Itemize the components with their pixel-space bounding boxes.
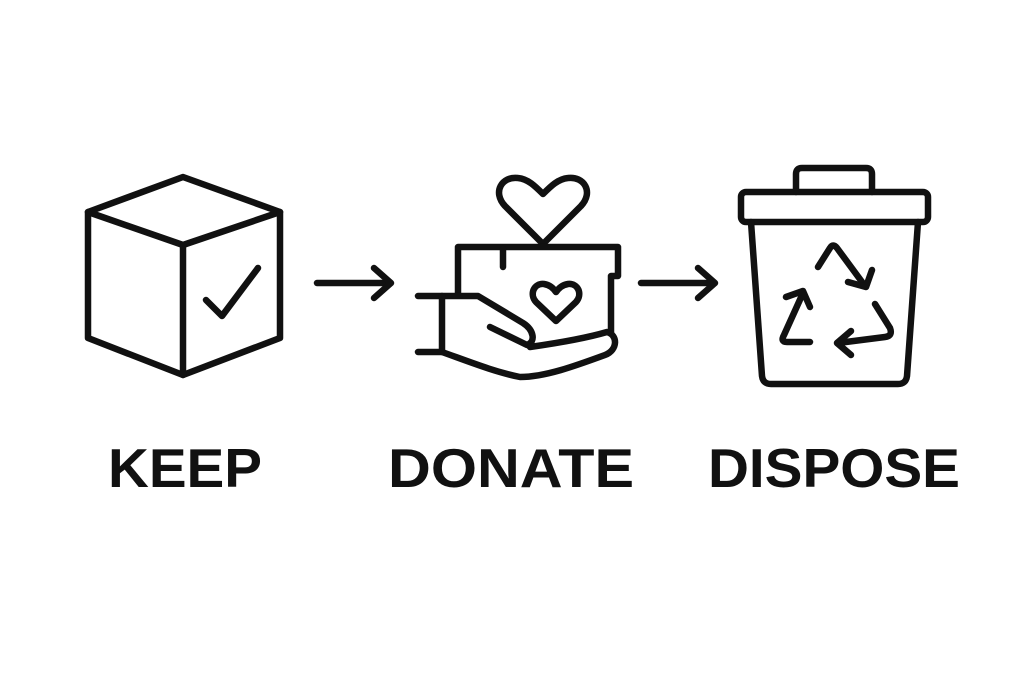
label: KEEP: KEEP xyxy=(108,437,262,499)
label: DISPOSE: DISPOSE xyxy=(708,437,960,499)
label: DONATE: DONATE xyxy=(388,437,634,499)
icon: trash bin with recycle symbol xyxy=(741,168,928,384)
arrow: donate to dispose xyxy=(641,268,715,298)
arrow: keep to donate xyxy=(317,268,391,298)
icon: hand giving box with hearts xyxy=(418,178,618,377)
icon: cube with checkmark xyxy=(88,177,280,375)
